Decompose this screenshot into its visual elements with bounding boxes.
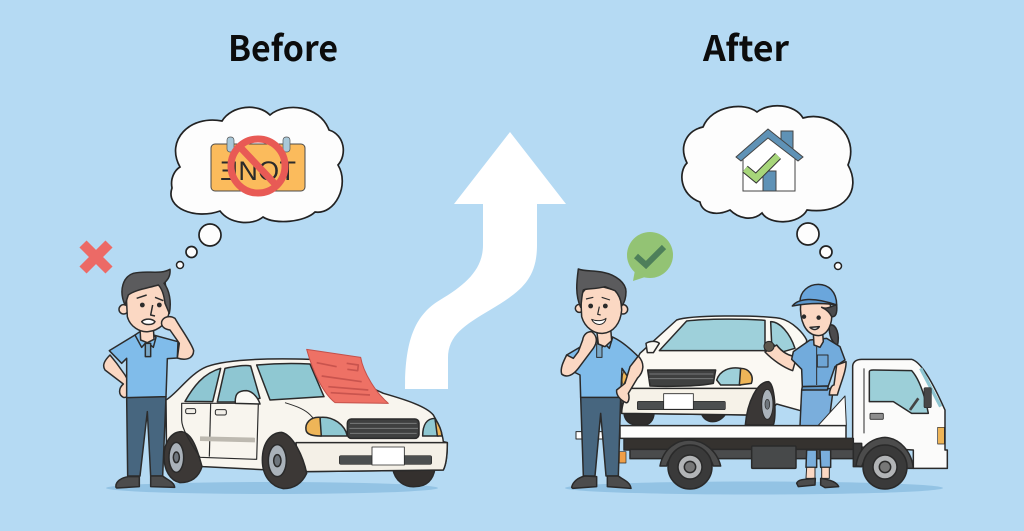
fenders	[660, 440, 721, 466]
front wheel	[262, 432, 307, 489]
mechanic legs	[806, 450, 831, 467]
truck wheels	[668, 445, 712, 489]
thought cloud: before	[171, 107, 343, 269]
mechanic arm	[829, 362, 846, 395]
ground shadow: after	[565, 482, 943, 494]
face details	[141, 303, 144, 307]
tow bed	[576, 432, 603, 439]
mechanic arm holding keys	[765, 345, 797, 371]
icon: green check speech bubble	[627, 232, 673, 281]
ramp	[818, 396, 846, 425]
door lines	[182, 403, 258, 459]
rear wheel	[164, 432, 202, 483]
icon: house with check	[736, 129, 803, 191]
far wheel	[393, 468, 435, 487]
heading: After: After	[702, 21, 790, 72]
man neck and head	[597, 328, 612, 347]
man hair	[577, 269, 626, 307]
shoes	[116, 476, 175, 488]
heading: Before: Before	[228, 21, 338, 72]
head	[140, 327, 154, 343]
man shoes	[572, 476, 631, 488]
man shirt	[563, 337, 638, 397]
truck cab	[853, 359, 947, 468]
man raised hand	[561, 332, 596, 376]
smiling man	[561, 269, 643, 488]
arrow: upward curved	[405, 132, 566, 389]
bumper	[296, 443, 447, 472]
mechanic face	[813, 333, 823, 347]
scene: tow truck with car, mechanic and smiling man	[561, 269, 947, 489]
icon: red cross	[83, 244, 109, 270]
thought cloud: after	[682, 106, 853, 270]
man arm on hip	[617, 356, 643, 403]
mechanic shirt	[792, 338, 845, 387]
icon: sign with prohibition	[211, 137, 305, 193]
red notice	[307, 349, 388, 403]
left arm	[104, 355, 132, 397]
ponytail	[829, 325, 838, 346]
man trousers	[581, 397, 621, 476]
person: worried man	[104, 269, 194, 488]
chassis	[624, 438, 853, 450]
car body	[166, 359, 447, 472]
trousers	[127, 397, 166, 476]
mirror	[235, 391, 260, 404]
mechanic trousers	[800, 388, 833, 427]
shirt	[109, 335, 178, 398]
cap	[800, 284, 837, 305]
hair	[122, 269, 170, 313]
right arm and hand	[162, 317, 194, 359]
ground shadow: before	[106, 482, 438, 494]
windows	[185, 368, 221, 402]
mechanic woman	[764, 284, 846, 488]
hood, lights, grille	[285, 403, 320, 437]
car: dirty white sedan with red notice	[164, 349, 447, 489]
icon: sign with prohibition: ƎNOT	[220, 156, 296, 186]
car on truck	[622, 316, 807, 425]
